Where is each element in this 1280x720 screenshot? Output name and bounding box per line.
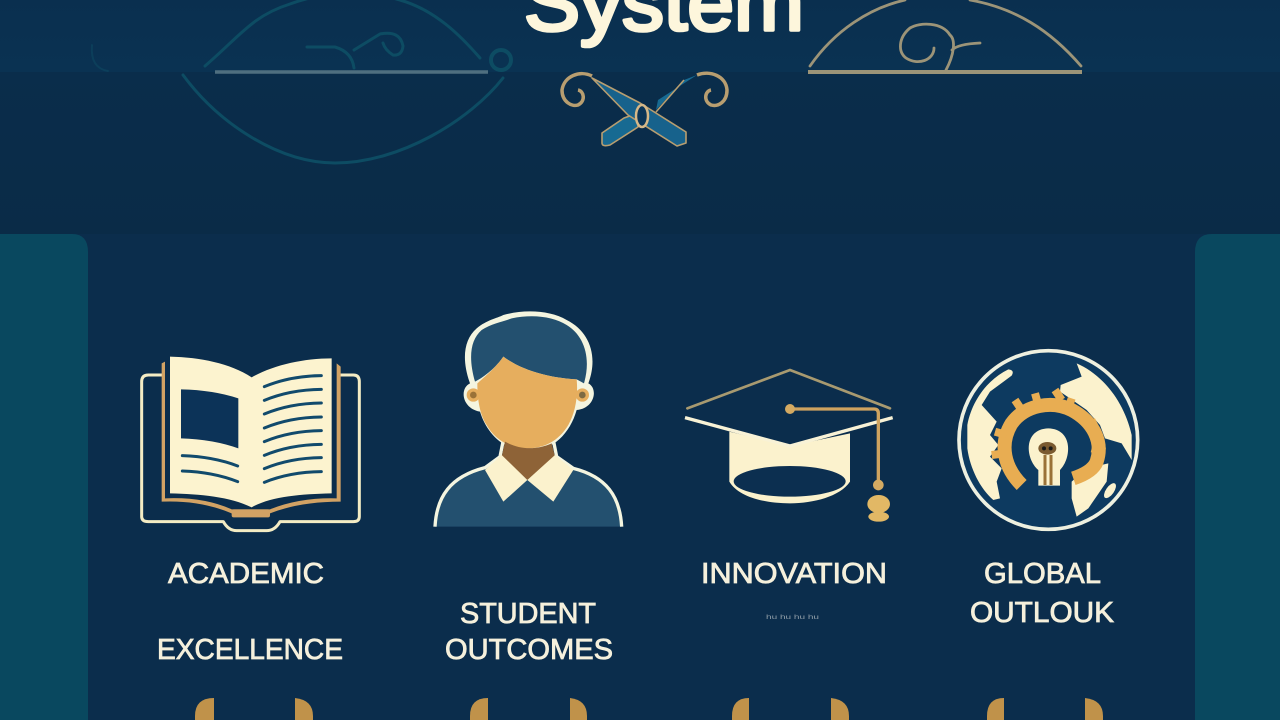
label: student outcomes: OUTCOMES <box>445 634 613 666</box>
label: innovation: INNOVATION <box>701 558 887 590</box>
cream pages <box>170 357 332 507</box>
panel: right side column <box>1195 234 1280 720</box>
face <box>477 357 577 448</box>
ears <box>467 388 480 402</box>
book cover outline <box>142 375 359 531</box>
gold page backing <box>162 362 341 517</box>
icon: globe with gear and lightbulb <box>959 351 1138 529</box>
hair <box>471 316 587 383</box>
label: global outlook: OUTLOUK <box>970 597 1115 629</box>
land masses <box>967 369 1013 500</box>
lightbulb <box>1029 428 1068 486</box>
small caption under innovation: hu hu hu hu <box>766 615 819 621</box>
ornament: gold dome with swirl, right <box>808 0 1082 72</box>
brim <box>685 418 893 446</box>
left page picture <box>181 389 238 448</box>
ornament: faint teal arc, left <box>92 0 511 163</box>
icon: student bust <box>435 311 622 527</box>
label: academic excellence: EXCELLENCE <box>157 634 343 666</box>
icon: graduation cap <box>685 370 893 522</box>
cap body <box>729 432 850 503</box>
ornament: crossed scissors emblem <box>562 73 727 146</box>
label: student outcomes: STUDENT <box>460 598 596 630</box>
label: academic excellence: ACADEMIC <box>168 558 324 590</box>
label: academic excellence <box>157 558 343 666</box>
gold tab pairs <box>195 698 1103 720</box>
neck <box>502 442 555 480</box>
collar <box>485 455 527 502</box>
text lines <box>182 376 321 482</box>
filament <box>1045 455 1051 485</box>
cap top outline <box>687 370 890 408</box>
globe disc <box>959 351 1138 529</box>
label: global outlook <box>970 558 1115 629</box>
tassel <box>790 409 878 485</box>
label: global outlook: GLOBAL <box>984 558 1101 590</box>
shirt <box>435 455 622 527</box>
panel: left side column <box>0 234 88 720</box>
gear ring <box>992 390 1105 485</box>
head outline <box>464 311 594 452</box>
icon: open book <box>142 357 359 531</box>
label: student outcomes <box>445 598 613 666</box>
